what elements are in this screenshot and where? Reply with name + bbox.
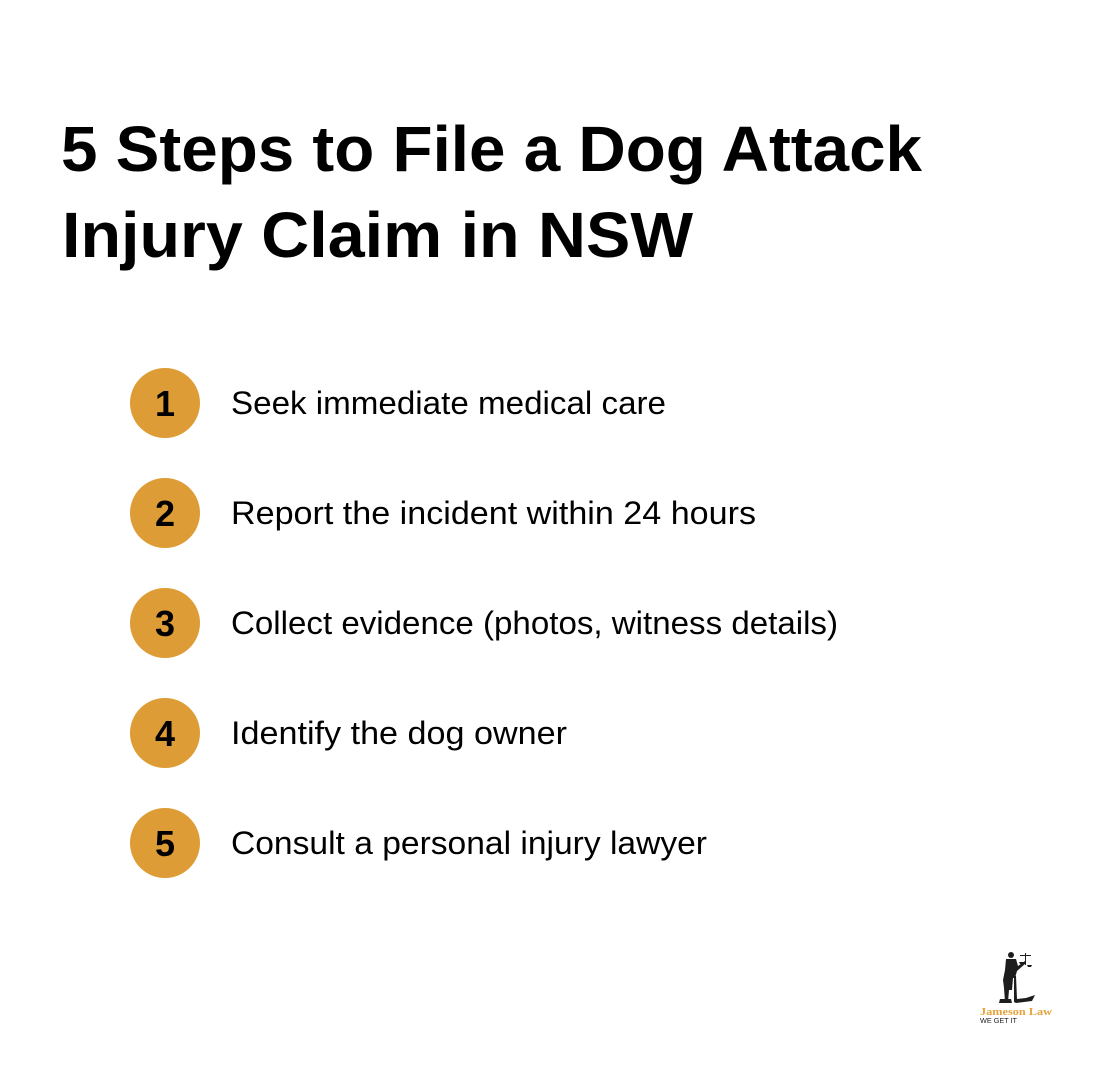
title: 5 Steps to File a Dog Attack <box>61 113 922 185</box>
step 4: Identify the dog owner <box>231 715 567 751</box>
step 4: 4 <box>155 713 175 754</box>
step 2: 2 <box>155 493 175 534</box>
steps list <box>130 368 838 878</box>
step 1: 1 <box>155 383 175 424</box>
step 2: Report the incident within 24 hours <box>231 495 756 531</box>
logo: Jameson Law <box>980 952 1052 1025</box>
step 4 <box>130 698 567 768</box>
step 5: 5 <box>155 823 175 864</box>
step 5: Consult a personal injury lawyer <box>231 825 707 861</box>
step 1 <box>130 368 666 438</box>
logo name: Jameson Law <box>980 1006 1052 1018</box>
step 5 <box>130 808 707 878</box>
step 2 <box>130 478 756 548</box>
step 1: Seek immediate medical care <box>231 385 666 421</box>
icon: lady justice with scales <box>999 952 1035 1003</box>
title <box>61 113 922 271</box>
step 3 <box>130 588 838 658</box>
logo tagline: WE GET IT <box>980 1018 1018 1025</box>
title: Injury Claim in NSW <box>62 199 694 271</box>
step 3: Collect evidence (photos, witness details) <box>231 605 838 641</box>
step 3: 3 <box>155 603 175 644</box>
